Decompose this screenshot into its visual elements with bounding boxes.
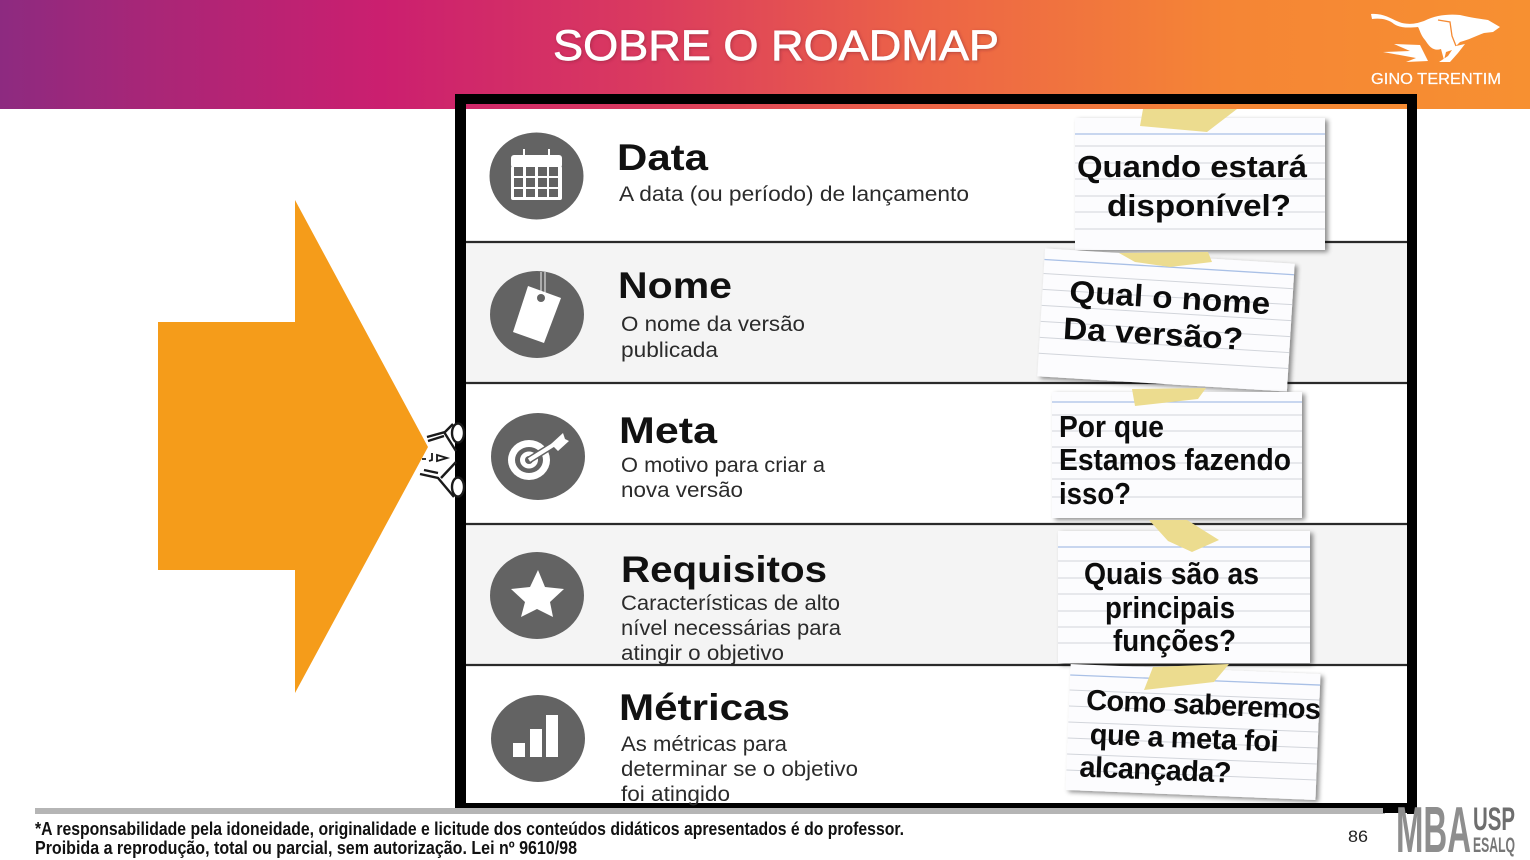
note text: Da versão? xyxy=(1062,311,1244,357)
note text: Estamos fazendo xyxy=(1059,442,1291,477)
heading: Data: Data xyxy=(617,137,708,178)
note text: que a meta foi xyxy=(1089,719,1279,758)
icon: star xyxy=(490,552,584,639)
description: Meta: O motivo para criar a xyxy=(621,454,825,477)
note text xyxy=(1059,409,1291,511)
note text xyxy=(1077,149,1308,223)
heading: Meta: Meta xyxy=(619,410,717,451)
description: Data: A data (ou período) de lançamento xyxy=(619,183,969,206)
heading: Métricas: Métricas xyxy=(619,687,790,728)
note card: Quais são as principais funções? xyxy=(1058,520,1310,663)
description: Requisitos: nível necessárias para xyxy=(621,617,841,640)
thick black frame xyxy=(455,94,1417,814)
description: Métricas: foi atingido xyxy=(621,783,730,806)
description: Meta: nova versão xyxy=(621,479,743,502)
description: Requisitos: Características de alto xyxy=(621,592,840,615)
footer rule xyxy=(35,806,1416,814)
tape xyxy=(1149,520,1219,552)
footer disclaimer: *A responsabilidade pela idoneidade, originalidade e licitude dos conteúdos didáticos apresentados é do professor. xyxy=(35,819,904,839)
icon: calendar xyxy=(490,132,584,220)
footer disclaimer xyxy=(35,819,904,858)
note text xyxy=(1079,685,1322,793)
description: Requisitos xyxy=(621,592,841,665)
description: Nome: O nome da versão xyxy=(621,313,805,336)
description: Nome xyxy=(621,313,805,362)
icon: tag xyxy=(490,271,584,358)
note text: Quais são as xyxy=(1084,556,1259,591)
description: Métricas: As métricas para xyxy=(621,733,787,756)
note text: principais xyxy=(1105,590,1235,625)
note text: Por que xyxy=(1059,409,1164,444)
footer disclaimer: Proibida a reprodução, total ou parcial, sem autorização. Lei nº 9610/98 xyxy=(35,838,577,858)
note text: Como saberemos xyxy=(1086,685,1322,726)
big orange arrow xyxy=(158,200,428,693)
row: Nome xyxy=(490,265,805,362)
note text: Qual o nome xyxy=(1068,274,1271,321)
description: Métricas: determinar se o objetivo xyxy=(621,758,858,781)
logo: Gino Terentim xyxy=(1371,14,1501,88)
tape xyxy=(1132,388,1206,406)
note text xyxy=(1084,556,1259,658)
row: Data xyxy=(490,132,969,220)
description: Meta xyxy=(621,454,825,502)
header band xyxy=(0,0,1530,109)
description: Requisitos: atingir o objetivo xyxy=(621,642,784,665)
note text: Quando estará xyxy=(1077,149,1308,184)
row: Meta xyxy=(491,410,825,502)
tape xyxy=(1140,109,1237,132)
note card: Qual o nome da versão? xyxy=(1037,248,1295,392)
note card: Por que estamos fazendo isso? xyxy=(1052,388,1302,518)
hand sketch holding frame xyxy=(420,424,464,497)
description: Métricas xyxy=(621,733,858,806)
row: Métricas xyxy=(491,687,858,806)
table rows xyxy=(466,109,1407,804)
note text: isso? xyxy=(1059,476,1131,511)
tape xyxy=(1119,252,1212,267)
note text: alcançada? xyxy=(1079,751,1232,790)
row: Requisitos xyxy=(490,549,841,665)
page number: 86 xyxy=(1348,827,1368,846)
note card: Quando estará disponível? xyxy=(1075,109,1325,250)
note text xyxy=(1062,274,1271,358)
description: Nome: publicada xyxy=(621,339,718,362)
icon: bar chart xyxy=(491,695,585,782)
note text: funções? xyxy=(1113,623,1236,658)
note card: Como saberemos que a meta foi alcançada? xyxy=(1066,664,1322,800)
heading: Nome: Nome xyxy=(618,265,732,306)
note text: disponível? xyxy=(1107,188,1291,223)
icon: target xyxy=(491,413,585,500)
tape xyxy=(1144,664,1229,690)
heading: Requisitos: Requisitos xyxy=(621,549,827,590)
title: SOBRE O ROADMAP xyxy=(553,22,999,70)
logo: Gino Terentim: GINO TERENTIM xyxy=(1371,71,1501,88)
